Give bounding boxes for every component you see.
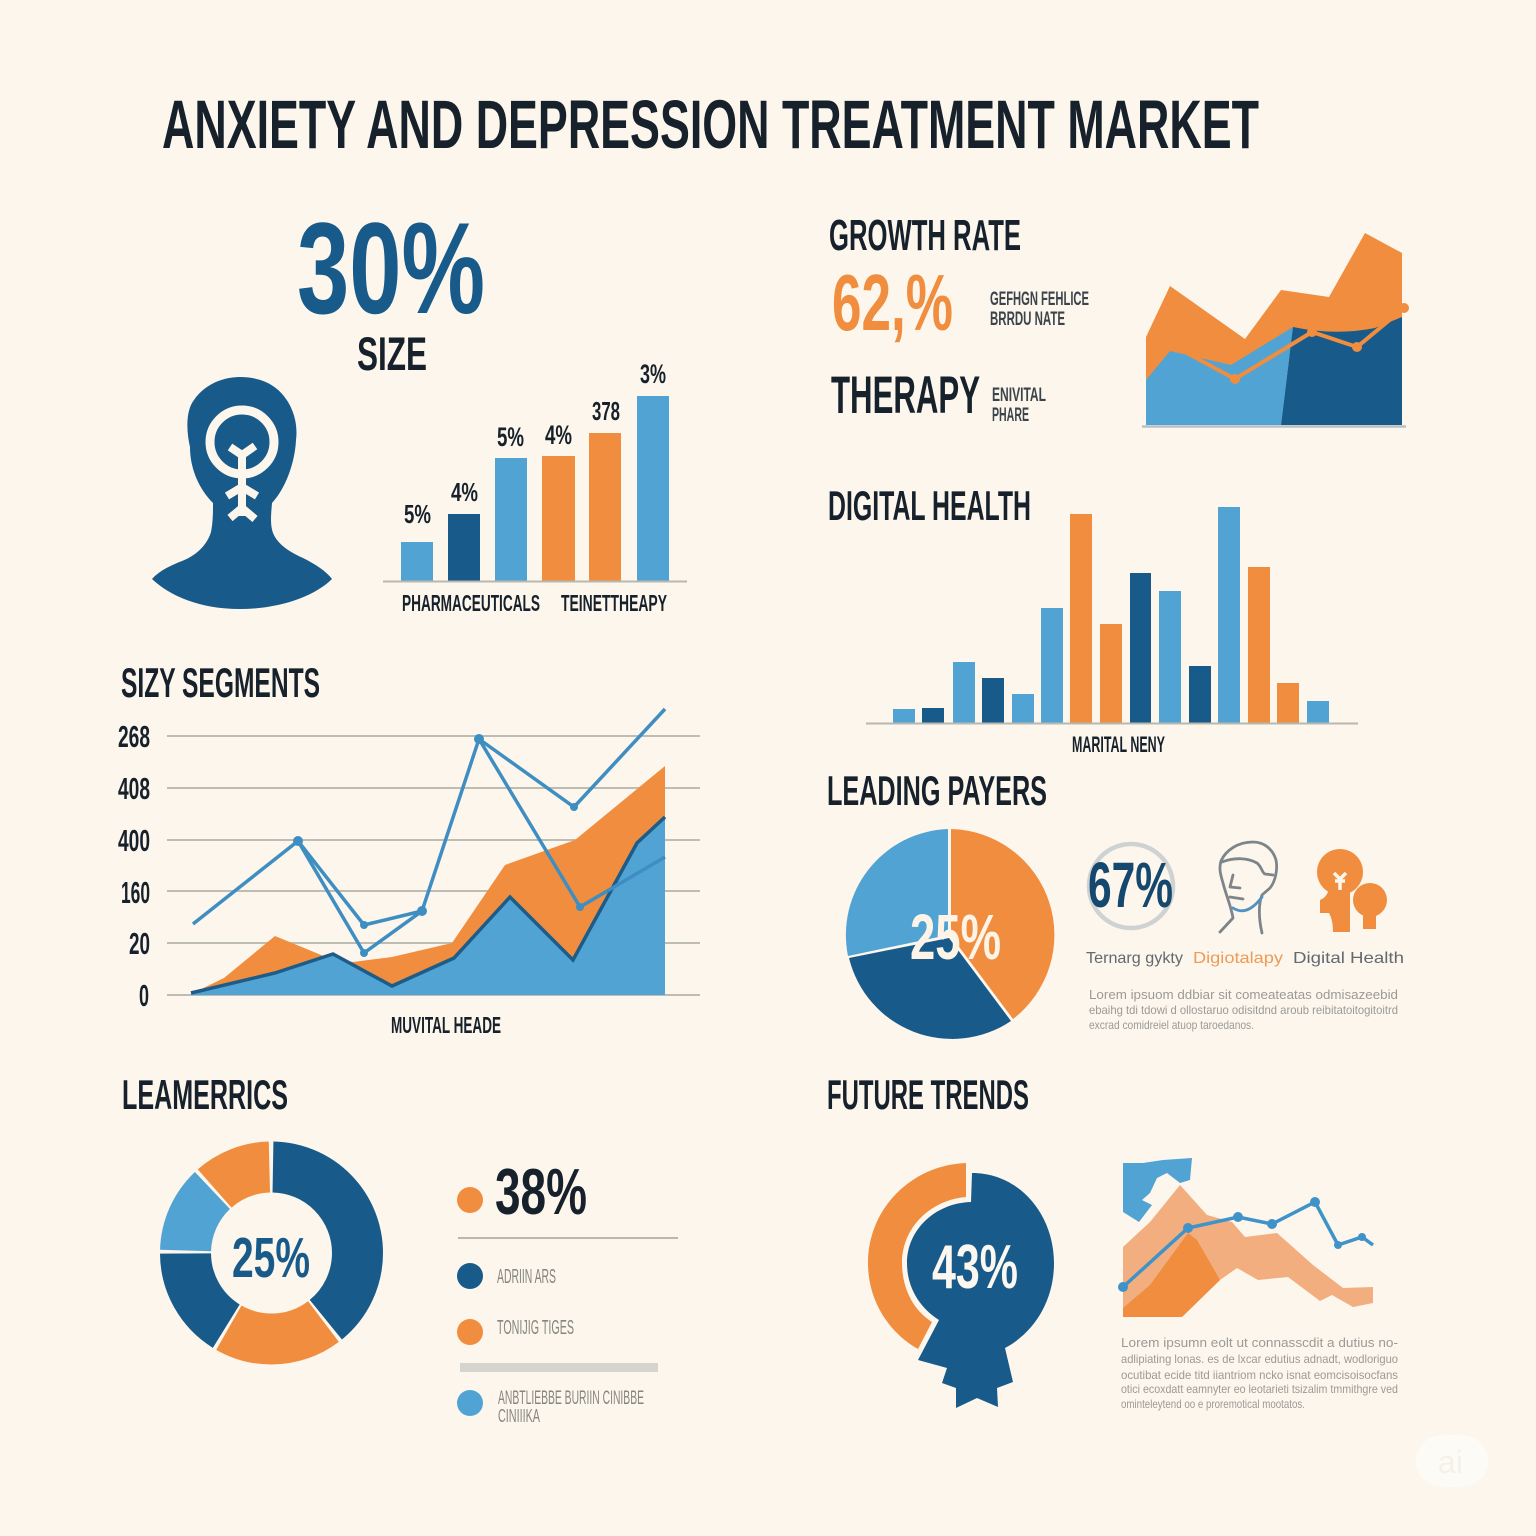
labels: segment names [1086,950,1404,967]
bar chart: segments: 5% [497,422,524,452]
bar chart: segments: 4% [545,420,572,450]
pie chart: 25% [910,901,1001,973]
panel: growth rate [829,211,1409,426]
bar chart: segments: 5% [404,499,431,529]
text block: lorem [1089,987,1398,1032]
text block: lorem: otici ecoxdatt eamnyter eo leotarieti tsizalim tmmithgre ved [1121,1382,1398,1396]
text block: lorem: excrad comidreiel atuop taroedanos. [1089,1018,1254,1032]
caption: growth: GEFHGN FEHLICE [990,289,1089,310]
bar chart: segments [383,359,687,616]
stat: 38% [457,1155,587,1228]
legend item: dark blue: ADRIIN ARS [497,1266,556,1288]
watermark: ai: ai [1438,1444,1463,1480]
label: size: SIZE [357,327,427,380]
labels: segment names: Digiotalapy [1193,950,1283,967]
line and area chart: 0 [139,978,149,1013]
stat: 38%: 38% [495,1155,587,1228]
big stat: 62%: 62,% [832,258,953,347]
text block: lorem: ebaihg tdi tdowi d ollostaruo odisitdnd aroub reibitatoitogitoitrd [1089,1003,1398,1017]
heading: future trends: FUTURE TRENDS [827,1071,1029,1118]
donut chart: 25% [232,1226,310,1290]
legend item: orange: TONIJIG TIGES [497,1317,574,1339]
legend item: light blue: ANBTLIEBBE BURIIN CINIBBE [498,1388,644,1409]
badge: 43%: 43% [932,1233,1018,1302]
panel: digital health [828,482,1358,757]
badge: 43% [868,1163,1054,1408]
axis label: MUVITAL HEADE [391,1012,501,1038]
panel: size segments [118,659,700,1038]
caption: growth [990,289,1089,330]
bar chart: segments: 378 [592,396,620,426]
caption: therapy: ENIVITAL [992,385,1046,406]
legend item: light blue: CINIIIKA [498,1406,540,1426]
legend item: orange [457,1317,574,1345]
donut chart [186,1167,358,1339]
text block: lorem: Lorem ipsuom ddbiar sit comeateatas odmisazeebid [1089,987,1398,1002]
text block: lorem: Lorem ipsumn eolt ut connasscdit a dutius no- [1121,1335,1398,1350]
text block: lorem [1121,1335,1398,1411]
heading: therapy: THERAPY [831,366,980,425]
pie chart [846,829,1054,1039]
bar chart: segments: 3% [640,359,666,389]
caption: therapy: PHARE [992,405,1029,426]
line and area chart: 400 [118,823,150,858]
heading: leading players: LEADING PAYERS [827,767,1047,814]
line and area chart [118,709,700,1013]
text block: lorem: adlipiating lonas. es de lxcar edutius adnadt, wodloriguo [1121,1352,1398,1366]
heading: size segments: SIZY SEGMENTS [121,659,320,706]
watermark: ai [1416,1435,1488,1487]
bar chart: digital health [866,507,1358,724]
axis label: MARITAL NENY [1072,732,1165,757]
stat ring: 67%: 67% [1088,849,1173,921]
chart: trend map and line [1118,1158,1373,1317]
caption: therapy [992,385,1046,426]
labels: segment names: Digital Health [1293,950,1404,967]
legend item: dark blue [457,1263,556,1289]
caption: growth: BRRDU NATE [990,309,1065,330]
legend item: light blue [457,1388,644,1426]
labels: segment names: Ternarg gykty [1086,950,1183,967]
panel: market size [152,195,687,616]
panel: future trends [827,1071,1398,1411]
heading: digital health: DIGITAL HEALTH [828,482,1031,529]
icon: orange heads [1317,849,1387,932]
line and area chart: 20 [129,926,150,961]
bar chart: segments: PHARMACEUTICALS [402,590,540,616]
big stat: 30%: 30% [297,195,485,341]
panel: leading players [827,767,1404,1039]
heading: leamerrics: LEAMERRICS [122,1071,288,1118]
heading: growth rate: GROWTH RATE [829,211,1021,260]
bar chart: segments: TEINETTHEAPY [561,590,667,616]
area chart: growth [1142,233,1409,426]
bar chart: segments: 4% [451,477,478,507]
panel: metrics [122,1071,678,1426]
stat ring: 67% [1088,844,1173,928]
icon: head silhouette [152,377,332,609]
icon: face outline [1220,842,1277,933]
text block: lorem: ocutibat ecide titd iiantriom ncko isnat eomcisoisocfans [1121,1368,1398,1382]
line and area chart: 268 [118,719,150,754]
line and area chart: 408 [118,771,150,806]
text block: lorem: ominteleytend oo e proremotical mootatos. [1121,1397,1305,1411]
line and area chart: 160 [121,875,150,910]
